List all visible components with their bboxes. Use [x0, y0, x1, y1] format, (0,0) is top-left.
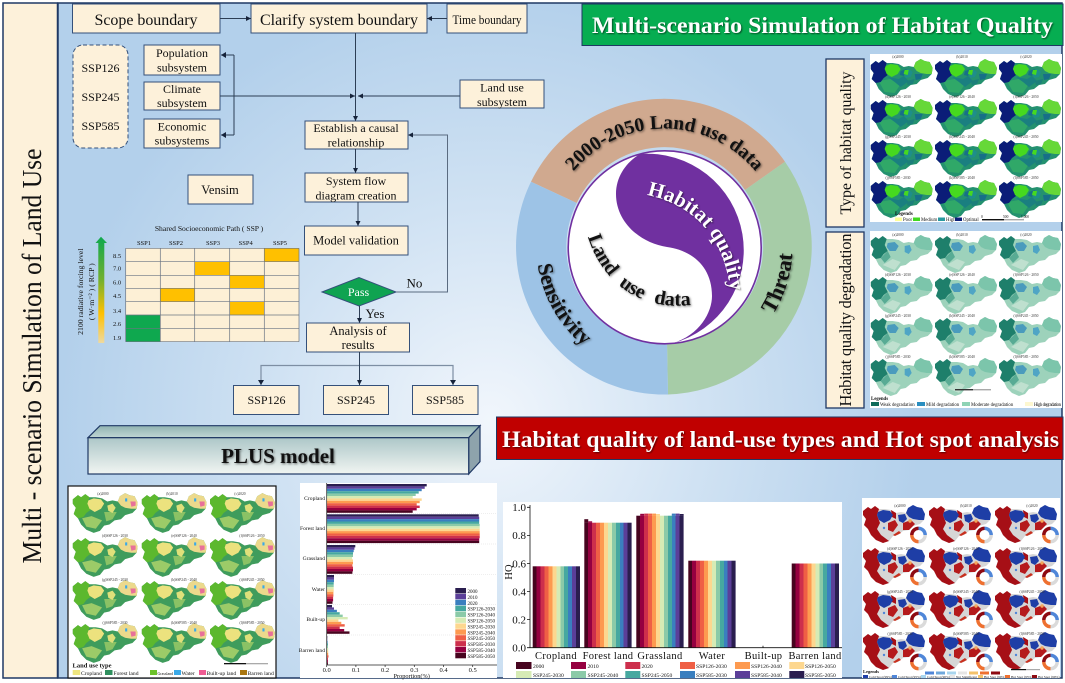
side label: Type of habitat quality	[826, 59, 864, 227]
matrix column labels: SSP3	[206, 240, 220, 247]
ring text: Sensitivity: Sensitivity	[538, 264, 592, 347]
title: Multi-scenario Simulation of Habitat Quality: Multi-scenario Simulation of Habitat Quality	[592, 13, 1054, 38]
yin-yang purple half	[616, 154, 744, 344]
RCP value labels: 1.9	[113, 335, 121, 342]
chart legend: 2010	[588, 664, 599, 670]
box: Time boundary	[447, 4, 527, 33]
map panel: land use types: (a)2000	[97, 492, 109, 496]
map panel: hot spot analysis: (e)SSP126 - 2040	[953, 547, 979, 551]
RCP value labels: 7.0	[113, 266, 121, 272]
x-axis ticks: 0.4	[439, 667, 448, 674]
x-axis ticks: 0.1	[352, 667, 360, 674]
legend: land use type: Grassland	[158, 672, 173, 676]
SSP-RCP matrix	[76, 224, 299, 343]
box: Clarify system boundary	[251, 4, 427, 33]
box: System flow diagram creation: System flow	[326, 174, 386, 188]
box: SSP126 result: SSP126	[247, 393, 286, 407]
bars: Cropland HQ	[533, 566, 580, 648]
category labels: Built-up	[306, 617, 325, 623]
map panel: hot spot analysis: (j)SSP585 - 2030	[888, 632, 913, 636]
arrow: establish to system flow	[354, 149, 356, 173]
legend: hot and cold spots: Hot Spot (99%)	[1038, 675, 1059, 679]
y-axis tick labels: 0.8	[512, 530, 526, 542]
ring text: Threat: Threat	[760, 253, 795, 314]
chart legend: 2010	[468, 596, 478, 601]
category labels: Cropland	[304, 496, 325, 502]
chart legend: SSP126-2040	[751, 664, 782, 670]
inner text: Land use data: Land use data	[588, 232, 692, 308]
chart legend: 2000	[533, 664, 544, 670]
RCP value labels	[113, 253, 122, 342]
dashed box: SSP scenarios: SSP585	[81, 119, 120, 133]
map panel: habitat quality degradation: (f)SSP126 - 2050	[1013, 273, 1039, 277]
legend: habitat quality classes: High	[946, 218, 956, 223]
map panel: type of habitat quality: (c)2020	[1020, 55, 1032, 59]
chart legend: SSP126-2030	[468, 608, 496, 613]
bars: Forest land	[327, 514, 480, 543]
matrix column labels: SSP4	[239, 240, 253, 247]
map panel: habitat quality degradation: (g)SSP245 - 2030	[885, 314, 911, 318]
dashed box: SSP scenarios	[73, 45, 128, 148]
legend: habitat quality classes: Poor	[903, 218, 912, 223]
left sidebar: Multi-scenario Simulation of Land Use	[3, 3, 58, 678]
inner text: Habitat quality: Habitat quality	[647, 182, 743, 291]
map panel: land use types: (f)SSP126 - 2050	[239, 534, 265, 538]
map panel: habitat quality degradation: (b)2010	[956, 233, 968, 237]
chart legend: 2020	[468, 602, 478, 607]
RCP value labels: 2.6	[113, 321, 122, 328]
legend: land use type: Built-up land	[206, 671, 236, 677]
box: Time boundary: Time boundary	[452, 12, 522, 27]
chart legend: 2020	[642, 664, 653, 670]
category labels: Forest land	[300, 526, 325, 532]
ring segment: Threat	[667, 162, 812, 394]
map panel: hot spot analysis: (i)SSP245 - 2050	[1020, 590, 1045, 594]
arrow: time to clarify	[427, 18, 447, 20]
box: Analysis of results	[306, 323, 410, 352]
legend: habitat quality classes: Medium	[921, 218, 938, 223]
bars: Forest land HQ	[584, 519, 632, 648]
legend: degradation classes: Moderate degradation	[971, 403, 1014, 408]
map panel: hot spot analysis: (l)SSP585 - 2050	[1020, 632, 1045, 636]
bars: Grassland HQ	[636, 514, 684, 648]
chart legend: SSP585-2040	[751, 673, 782, 679]
category labels: Grassland	[637, 651, 683, 662]
box: Climate subsystem	[144, 82, 220, 110]
feedback arrow: No back to causal relationship	[396, 135, 448, 292]
box: Economic subsystems	[144, 119, 220, 148]
category labels: Cropland	[535, 651, 577, 662]
chart legend: 2000	[468, 590, 478, 595]
box: SSP245 result	[324, 386, 388, 414]
y-axis tick labels: 0.4	[512, 586, 526, 598]
box: Analysis of results: Analysis of	[329, 324, 387, 338]
map panel: habitat quality degradation: (i)SSP245 - 2050	[1014, 314, 1039, 318]
ring segment: Sensitivity	[516, 182, 668, 395]
box: Model validation	[304, 226, 408, 255]
chart legend: SSP126-2030	[696, 664, 727, 670]
legend: habitat quality classes: 500	[1003, 215, 1009, 219]
chart legend: SSP126-2040	[468, 614, 496, 619]
chart legend: SSP585-2050	[805, 673, 836, 679]
bars: Barren land	[327, 636, 328, 665]
box: Land use subsystem	[460, 80, 544, 109]
legend: hot and cold spots	[863, 669, 1059, 679]
map panel: hot spot analysis: (a)2000	[894, 504, 906, 508]
RCP value labels: 8.5	[113, 253, 121, 260]
box: Scope boundary	[72, 4, 220, 33]
title: Habitat quality of land-use types and Hot spot analysis	[496, 417, 1063, 460]
map panel: type of habitat quality: (g)SSP245 - 2030	[885, 135, 911, 139]
box: Land use subsystem: subsystem	[477, 95, 528, 109]
matrix grid	[126, 248, 299, 342]
matrix column labels: SSP2	[169, 240, 183, 247]
legend: land use type: Land use type	[72, 662, 112, 670]
dashed box: SSP scenarios: SSP245	[81, 90, 120, 104]
bars: Cropland	[327, 484, 427, 513]
box: SSP245 result: SSP245	[337, 393, 375, 407]
arrow: clarify to causal relationship	[354, 33, 356, 121]
label: No: No	[406, 276, 422, 290]
map panel: type of habitat quality: (k)SSP585 - 2040	[949, 176, 975, 180]
matrix column labels: SSP5	[273, 240, 287, 247]
map panel: hot spot analysis: (f)SSP126 - 2050	[1019, 547, 1045, 551]
legend: degradation classes: Weak degradation	[880, 403, 915, 408]
x-axis ticks: 0.0	[323, 667, 331, 674]
y-axis tick labels: 0.2	[512, 614, 526, 626]
chart legend: SSP245-2050	[468, 637, 496, 642]
legend: hot and cold spots: Not Significant	[956, 675, 977, 679]
map panel: habitat quality degradation: (k)SSP585 - 2040	[949, 355, 975, 359]
box: SSP126 result	[234, 386, 299, 414]
legend: degradation classes: Legends	[871, 397, 888, 402]
y-axis tick labels: 0.6	[512, 558, 526, 570]
legend: habitat quality classes: Optimal	[963, 218, 979, 223]
bracket arrows between subsystems	[221, 55, 234, 135]
x-axis title: Proportion(%)	[394, 673, 430, 680]
decision diamond: Pass: Pass	[348, 285, 369, 299]
arrow: pass to analysis	[358, 306, 360, 323]
map panel: habitat quality degradation: (l)SSP585 - 2050	[1014, 355, 1039, 359]
arrow: climate to main flow	[220, 95, 355, 97]
label: Yes: Yes	[366, 306, 384, 321]
map panel: land use types: (b)2010	[166, 492, 178, 496]
map panel: land use types: (h)SSP245 - 2040	[171, 578, 197, 582]
bars: Water	[327, 575, 334, 604]
map panel: land use types: (l)SSP585 - 2050	[240, 621, 265, 625]
central ring and yin-yang diagram	[516, 98, 812, 394]
box: Clarify system boundary: Clarify system boundary	[260, 12, 418, 29]
map panel: type of habitat quality: (i)SSP245 - 2050	[1014, 135, 1039, 139]
box: Population subsystem	[144, 45, 220, 75]
chart legend: SSP245-2030	[468, 625, 496, 630]
yin-yang white half	[568, 151, 761, 344]
category labels: Barren land	[299, 648, 325, 654]
decision diamond: Pass	[322, 278, 396, 306]
legend: hot and cold spots: Cold Spot (99%)	[869, 675, 892, 679]
legend: degradation classes: High degradation	[1034, 403, 1062, 408]
forcing level axis label	[76, 248, 96, 335]
chart legend: SSP245-2040	[588, 673, 618, 679]
box: Economic subsystems: Economic	[158, 120, 206, 134]
chart legend: SSP245-2040	[468, 631, 496, 636]
side label: Type of habitat quality: Type of habitat quality	[838, 72, 855, 214]
legend: hot and cold spots: Hot Spot (95%)	[1011, 675, 1032, 679]
bars: Built-up	[327, 605, 350, 634]
PLUS model 3D block: PLUS model	[221, 444, 335, 468]
ring text: 2000-2050 Land use data: 2000-2050 Land use data	[564, 116, 763, 173]
arrow: system flow to validation	[357, 202, 359, 226]
map panel: hot spot analysis: (b)2010	[960, 504, 972, 508]
axes	[327, 483, 497, 667]
matrix column labels	[137, 240, 287, 247]
map panel: hot spot analysis: (d)SSP126 - 2030	[887, 547, 913, 551]
chart legend: SSP585-2030	[468, 643, 496, 648]
bars: Barren land HQ	[792, 564, 839, 648]
legend: habitat quality classes: Legends	[895, 212, 913, 217]
box: Analysis of results: results	[342, 338, 374, 352]
chart legend	[455, 588, 496, 660]
chart legend: SSP126-2050	[468, 620, 496, 624]
map panel: habitat quality degradation: (a)2000	[892, 233, 904, 237]
arrow: scope to clarify	[220, 18, 251, 20]
box: Land use subsystem: Land use	[480, 81, 524, 95]
box: Vensim	[188, 175, 253, 204]
box: Economic subsystems: subsystems	[155, 134, 210, 148]
category labels: Built-up	[745, 651, 782, 662]
y-axis tick labels: 0.0	[512, 642, 526, 654]
category labels: Water	[312, 587, 325, 593]
legend: hot and cold spots: Legends	[863, 669, 879, 674]
legend: land use type: Forest land	[114, 671, 139, 677]
chart legend: SSP126-2050	[805, 664, 836, 670]
legend: land use type: Water	[182, 671, 195, 677]
box: Vensim: Vensim	[201, 183, 239, 197]
chart legend: SSP245-2030	[533, 673, 564, 679]
map panel: habitat quality degradation: (h)SSP245 - 2040	[949, 314, 975, 318]
chart legend: SSP245-2050	[642, 673, 672, 679]
x-axis ticks: 0.2	[381, 667, 389, 674]
category labels: Forest land	[583, 651, 634, 662]
title: Multi-scenario Simulation of Habitat Quality	[582, 4, 1063, 46]
side label: Habitat quality degradation: Habitat quality degradation	[836, 234, 855, 406]
dashed box: SSP scenarios: SSP126	[81, 61, 120, 75]
legend: habitat quality classes: 0	[981, 215, 983, 219]
arrow: land use to main flow	[358, 95, 460, 97]
box: Climate subsystem: subsystem	[157, 96, 208, 110]
map panel: hot spot analysis: (g)SSP245 - 2030	[887, 590, 913, 594]
chart legend	[516, 662, 836, 679]
arrowheads on bracket	[221, 52, 226, 138]
map panel: land use types: (k)SSP585 - 2040	[171, 621, 197, 625]
legend: degradation classes	[871, 389, 1062, 408]
map panel: hot spot analysis: (h)SSP245 - 2040	[953, 590, 979, 594]
axes	[527, 505, 842, 648]
box: Population subsystem: subsystem	[157, 60, 208, 74]
legend: land use type: Cropland	[81, 671, 102, 677]
box: Scope boundary: Scope boundary	[94, 12, 198, 29]
forcing level axis label: ( W·m⁻² ) ( RCP )	[87, 263, 96, 320]
map panel: land use types: (g)SSP245 - 2030	[102, 578, 128, 582]
group separators	[327, 513, 497, 635]
map panel: type of habitat quality: (j)SSP585 - 2030	[886, 176, 911, 180]
map panel: habitat quality degradation: (j)SSP585 - 2030	[886, 355, 911, 359]
map panel: type of habitat quality: (a)2000	[892, 55, 904, 59]
forcing level arrow	[96, 237, 107, 343]
chart legend: SSP585-2040	[468, 649, 496, 654]
box: Establish a causal relationship: Establish a causal	[313, 121, 399, 135]
title: Habitat quality of land-use types and Hot spot analysis: Habitat quality of land-use types and Hot spot analysis	[502, 427, 1059, 453]
map panel: land use types: (c)2020	[234, 492, 246, 496]
map panel: type of habitat quality: (b)2010	[956, 55, 968, 59]
legend: land use type	[72, 662, 274, 677]
map panel: habitat quality degradation: (c)2020	[1020, 233, 1032, 237]
category labels: Barren land	[788, 651, 842, 662]
legend: hot and cold spots: Cold Spot (95%)	[898, 675, 921, 679]
bars: Grassland	[327, 545, 355, 574]
box: Climate subsystem: Climate	[163, 82, 201, 96]
x-axis ticks: 0.5	[469, 667, 477, 674]
map panel: land use types: (e)SSP126 - 2040	[171, 534, 197, 538]
map panel: type of habitat quality: (f)SSP126 - 2050	[1013, 95, 1039, 99]
map panel: hot spot analysis: (k)SSP585 - 2040	[953, 632, 979, 636]
legend: habitat quality classes: 1,000	[1021, 215, 1029, 220]
map panel: habitat quality degradation: (d)SSP126 - 2030	[885, 273, 911, 277]
y-axis tick labels	[512, 502, 526, 654]
map panel: type of habitat quality: (h)SSP245 - 2040	[949, 135, 975, 139]
map panel: land use types	[68, 486, 276, 678]
RCP value labels: 6.0	[113, 280, 121, 286]
matrix title: Shared Socioeconomic Path ( SSP )	[155, 224, 264, 233]
PLUS model 3D block	[88, 426, 480, 474]
y-axis tick labels: 1.0	[512, 502, 526, 514]
map panel: habitat quality degradation: (e)SSP126 - 2040	[949, 273, 975, 277]
x-axis ticks: 0.3	[410, 667, 418, 674]
branching arrows to SSP boxes	[258, 352, 456, 385]
map panel: habitat quality degradation	[870, 231, 1062, 408]
map panel: hot spot analysis	[862, 498, 1060, 679]
legend: land use type: Barren land	[248, 671, 274, 677]
box: SSP585 result	[412, 386, 478, 414]
chart legend: SSP585-2050	[468, 655, 496, 660]
RCP value labels: 4.5	[113, 293, 121, 300]
legend: hot and cold spots: Cold Spot (90%)	[927, 675, 950, 679]
category labels: Water	[699, 651, 725, 662]
legend: degradation classes: Mild degradation	[926, 403, 960, 408]
box: Establish a causal relationship: relationship	[328, 136, 384, 150]
box: SSP585 result: SSP585	[426, 393, 464, 407]
map panel: hot spot analysis: (c)2020	[1026, 504, 1038, 508]
legend: habitat quality classes	[895, 212, 1029, 223]
y-axis title: HQ	[504, 564, 515, 580]
box: System flow diagram creation: diagram creation	[316, 188, 396, 202]
map panel: type of habitat quality: (l)SSP585 - 2050	[1014, 176, 1039, 180]
ring segment: 2000-2050 Land use data	[531, 99, 785, 203]
forcing level axis label: 2100 radiative forcing level	[76, 248, 85, 335]
map panel: type of habitat quality	[870, 54, 1062, 223]
bars: Water HQ	[688, 561, 736, 648]
x-axis ticks	[323, 667, 477, 674]
left sidebar: Multi-scenario Simulation of Land Use: Multi - scenario Simulation of Land Use	[17, 148, 47, 564]
bar chart: habitat quality by land-use type	[503, 502, 842, 679]
map panel: land use types: (j)SSP585 - 2030	[103, 621, 128, 625]
map panel: land use types: (i)SSP245 - 2050	[240, 578, 265, 582]
RCP value labels: 3.4	[113, 308, 122, 315]
category labels	[535, 651, 842, 662]
category labels: Grassland	[303, 556, 325, 562]
legend: hot and cold spots: Hot Spot (90%)	[984, 675, 1005, 679]
box: Establish a causal relationship	[305, 121, 408, 150]
map panel: type of habitat quality: (d)SSP126 - 2030	[885, 95, 911, 99]
matrix column labels: SSP1	[137, 240, 151, 247]
bar chart: land use proportion	[299, 483, 497, 680]
chart legend: SSP585-2030	[696, 673, 727, 679]
map panel: type of habitat quality: (e)SSP126 - 2040	[949, 95, 975, 99]
category labels	[299, 496, 325, 654]
box: Model validation: Model validation	[313, 234, 400, 248]
map panel: land use types: (d)SSP126 - 2030	[102, 534, 128, 538]
box: System flow diagram creation	[305, 173, 408, 202]
box: Population subsystem: Population	[156, 46, 208, 60]
side label: Habitat quality degradation	[826, 232, 864, 408]
